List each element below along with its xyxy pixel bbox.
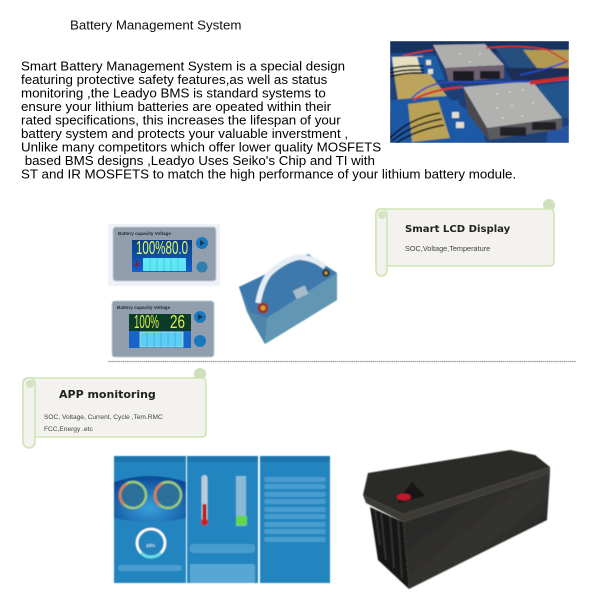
intro text block: ensure your lithium batteries are opeated within their	[21, 99, 332, 114]
LCD display: temperature reading	[112, 301, 214, 357]
dashed divider	[108, 360, 576, 362]
app screenshot: gauges	[114, 456, 186, 583]
LCD display: temperature reading: 100%	[134, 312, 159, 332]
callout heading: Smart LCD Display	[405, 224, 511, 235]
LCD display: voltage reading	[108, 224, 220, 286]
LCD display: temperature reading: 26	[170, 312, 185, 332]
callout description: SOC, Voltage, Current, Cycle ,Tem.RMC	[44, 414, 163, 421]
photo: black battery	[363, 450, 550, 589]
photo: blue battery with white handle	[239, 254, 337, 344]
label on LCD panel: Battery capacity Voltage	[118, 231, 171, 236]
app screenshot: parameter list	[260, 456, 330, 583]
intro text block: Unlike many competitors which offer lower quality MOSFETS	[21, 140, 381, 154]
intro text block: Smart Battery Management System is a special design	[21, 58, 345, 74]
app screenshot: gauges: 18%	[146, 543, 155, 548]
callout: APP monitoring	[23, 368, 206, 448]
intro text block: based BMS designs ,Leadyo Uses Seiko's Chip and TI with	[21, 153, 375, 168]
callout description: SOC,Voltage,Temperature	[405, 244, 490, 253]
intro text block	[21, 58, 516, 182]
callout heading: APP monitoring	[59, 388, 156, 401]
app screenshot: temperature and SOC tubes	[187, 456, 258, 583]
title: Battery Management System	[70, 18, 241, 32]
intro text block: monitoring ,the Leadyo BMS is standard systems to	[21, 86, 326, 100]
callout: Smart LCD Display	[376, 199, 555, 276]
intro text block: rated specifications, this increases the lifespan of your	[21, 112, 341, 128]
intro text block: featuring protective safety features,as well as status	[21, 72, 328, 87]
callout description: FCC,Energy .etc	[44, 426, 93, 433]
LCD display: voltage reading: 100%80.0	[136, 238, 188, 258]
photo: BMS boards	[390, 41, 569, 143]
intro text block: ST and IR MOSFETS to match the high performance of your lithium battery module.	[21, 166, 516, 182]
intro text block: battery system and protects your valuable inverstment ,	[21, 126, 348, 141]
label on LCD panel: Battery capacity Voltage	[117, 305, 170, 310]
callout description	[44, 414, 163, 433]
